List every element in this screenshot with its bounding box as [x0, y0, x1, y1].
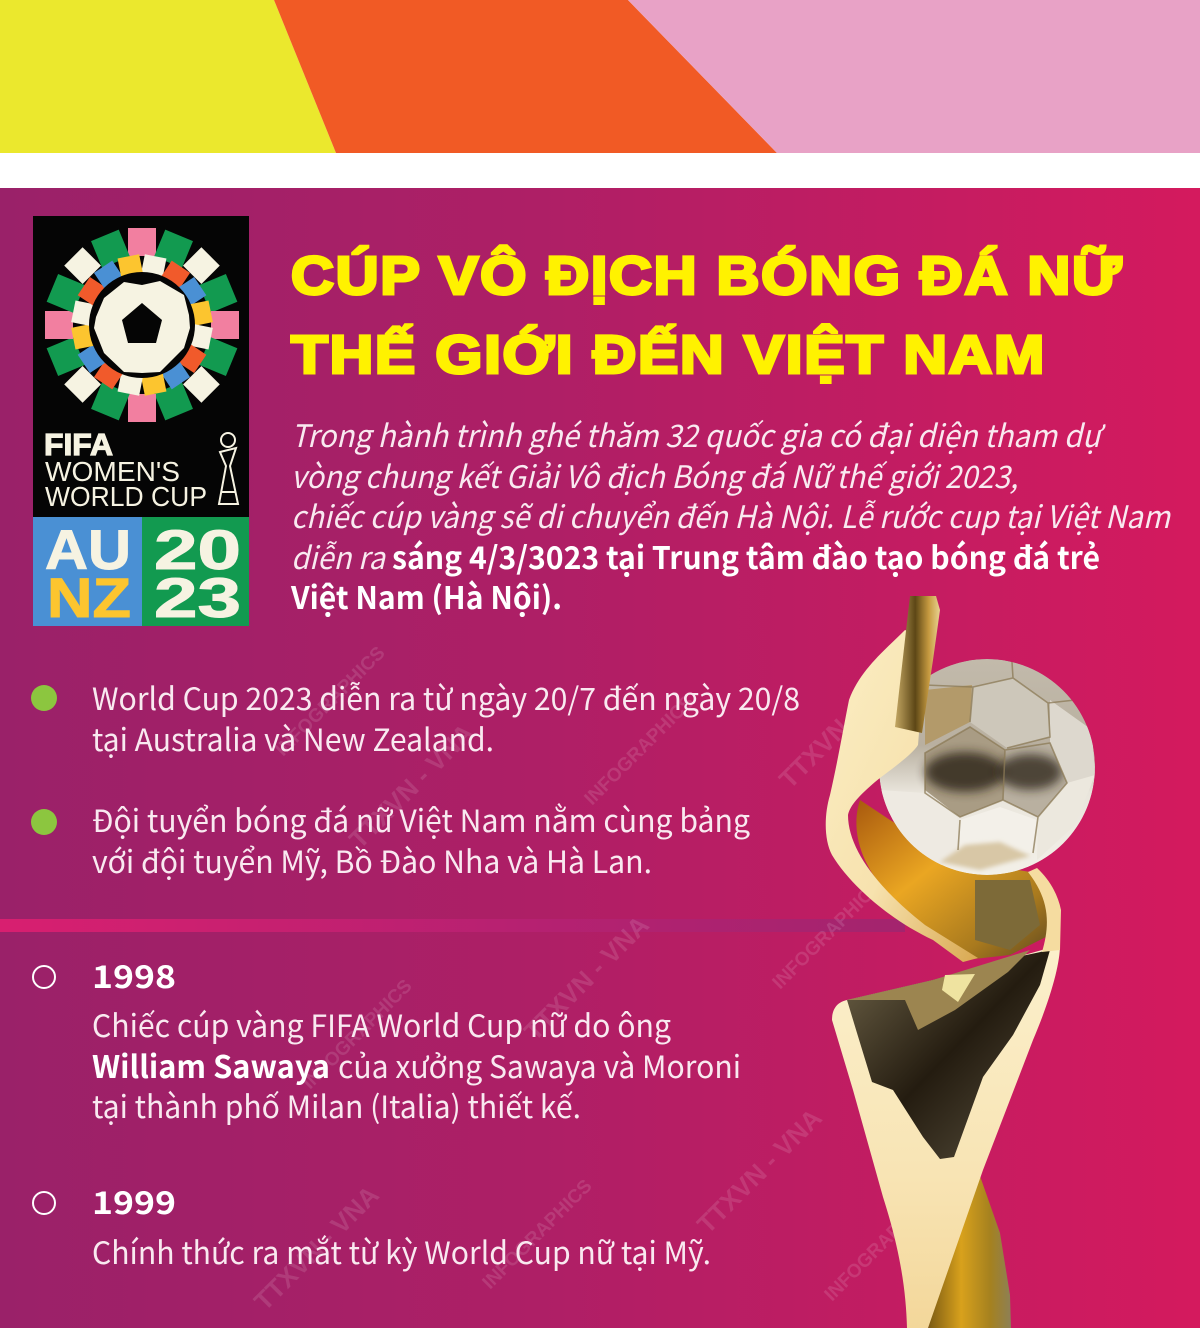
watermarks: INFOGRAPHICS: [299, 976, 417, 1094]
icon: small trophy outline: [219, 433, 238, 504]
top colour band: [0, 0, 1200, 188]
watermarks: TTXVN - VNA: [691, 1102, 828, 1239]
timeline: 1999: 1999: [92, 1178, 176, 1223]
intro text block: chiếc cúp vàng sẽ di chuyển đến Hà Nội. Lễ rước cup tại Việt Nam: [291, 492, 1171, 537]
timeline: 1998: của xưởng Sawaya và Moroni: [338, 1042, 741, 1087]
intro text block: vòng chung kết Giải Vô địch Bóng đá Nữ thế giới 2023,: [291, 452, 1018, 497]
trophy lower gold twist: [928, 1176, 1011, 1328]
intro text block: Trong hành trình ghé thăm 32 quốc gia có đại diện tham dự: [291, 411, 1106, 456]
logo football: [89, 272, 195, 378]
timeline: 1998: 1998: [92, 952, 176, 997]
logo wordmark: WORLD CUP: [45, 481, 207, 512]
intro text block: sáng 4/3/3023 tại Trung tâm đào tạo bóng đá trẻ: [392, 533, 1100, 578]
FIFA Women's World Cup logo: [33, 216, 249, 629]
timeline: 1999: Chính thức ra mắt từ kỳ World Cup nữ tại Mỹ.: [92, 1228, 711, 1273]
trophy upper cream ribbon: [826, 630, 978, 962]
bullet: group: Đội tuyển bóng đá nữ Việt Nam nằm cùng bảng: [92, 796, 750, 841]
title: CÚP VÔ ĐỊCH BÓNG ĐÁ NỮ: [291, 245, 1123, 306]
logo wordmark: WOMEN'S: [45, 456, 180, 487]
watermarks: TTXVN - VNA: [343, 717, 480, 854]
title: THẾ GIỚI ĐẾN VIỆT NAM: [291, 324, 1046, 385]
watermarks: TTXVN - VNA: [518, 909, 655, 1046]
logo wordmark: FIFA: [44, 427, 113, 462]
bullet: dates: World Cup 2023 diễn ra từ ngày 20/7 đến ngày 20/8: [92, 674, 800, 719]
trophy ball: [879, 659, 1095, 875]
logo wordmark: [44, 427, 207, 512]
timeline: 1998: William Sawaya: [92, 1042, 330, 1087]
bullet: dates: [31, 674, 800, 760]
logo AU NZ 2023: [45, 518, 241, 629]
watermarks: [248, 643, 939, 1316]
watermarks: INFOGRAPHICS: [479, 1176, 597, 1294]
bullet: dates: tại Australia và New Zealand.: [92, 715, 494, 760]
timeline: 1998: [33, 952, 741, 1127]
logo inner ring tiles: [71, 254, 213, 396]
bullet: group: [31, 796, 750, 882]
divider band: [0, 919, 905, 932]
watermarks: INFOGRAPHICS: [581, 692, 699, 810]
logo outer ring tiles: [45, 228, 239, 422]
trophy upper inner gold: [856, 800, 1055, 960]
bullet: group: với đội tuyển Mỹ, Bồ Đào Nha và Hà Lan.: [92, 837, 652, 882]
trophy dark reflection: [847, 950, 1050, 1159]
logo AU NZ 2023: 23: [154, 566, 241, 629]
logo AU NZ 2023: 20: [154, 518, 241, 581]
intro text block: Việt Nam (Hà Nội).: [290, 573, 562, 618]
timeline: 1998: Chiếc cúp vàng FIFA World Cup nữ do ông: [92, 1001, 671, 1046]
logo AU NZ 2023: AU: [45, 518, 131, 581]
watermarks: INFOGRAPHICS: [821, 1188, 939, 1306]
title: [291, 245, 1123, 385]
watermarks: TTXVN - VNA: [773, 657, 910, 794]
watermarks: TTXVN - VNA: [248, 1179, 385, 1316]
trophy post: [895, 596, 940, 733]
timeline: 1998: tại thành phố Milan (Italia) thiết kế.: [92, 1082, 581, 1127]
watermarks: INFOGRAPHICS: [272, 643, 390, 761]
watermarks: INFOGRAPHICS: [769, 876, 887, 994]
intro text block: [290, 411, 1171, 618]
timeline: 1999: [33, 1178, 711, 1273]
trophy lower cream ribbon: [832, 945, 1060, 1328]
intro text block: diễn ra: [291, 533, 386, 578]
trophy: [826, 596, 1095, 1328]
logo AU NZ 2023: NZ: [47, 566, 131, 629]
